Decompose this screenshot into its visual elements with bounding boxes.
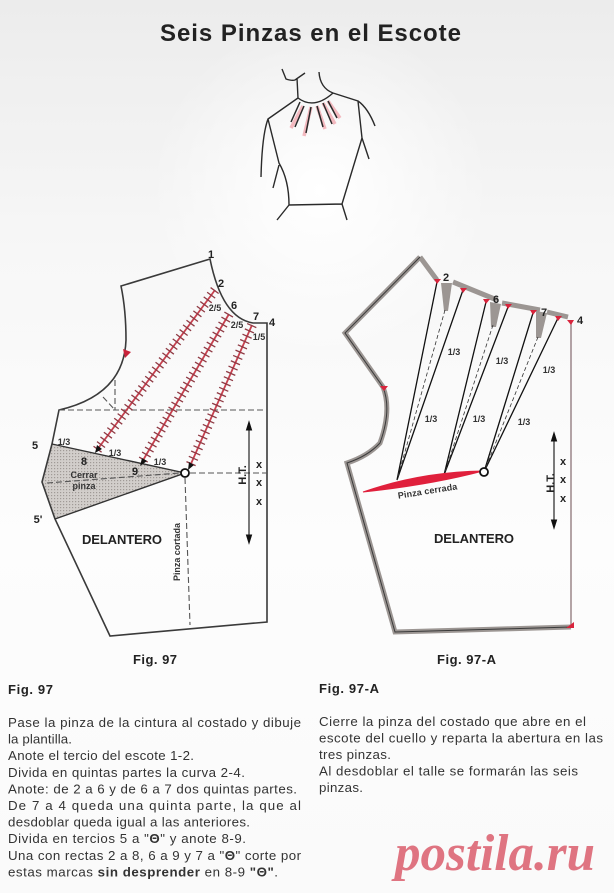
diagram point labels: 4 xyxy=(577,315,584,327)
diagram point labels: 2/5 xyxy=(209,303,221,313)
red notches xyxy=(380,279,574,628)
text block: Fig. 97 instructions xyxy=(8,682,302,879)
diagram point labels: x xyxy=(560,474,567,486)
diagram point labels: x xyxy=(560,493,567,505)
apex circle xyxy=(480,468,488,476)
apex circle xyxy=(181,469,189,477)
slash arrowheads xyxy=(95,445,194,470)
diagram point labels: 1/3 xyxy=(496,356,508,366)
diagram point labels: 6 xyxy=(231,300,237,312)
pattern diagram: Fig. 97-A xyxy=(345,257,584,632)
text block: Fig. 97-A instructions: Cierre la pinza del costado que abre en el xyxy=(319,714,586,729)
pattern diagram: Fig. 97 xyxy=(32,249,276,636)
text block: Fig. 97 instructions: estas marcas sin desprender en 8-9 "Θ". xyxy=(8,864,278,879)
diagram point labels: 4 xyxy=(269,317,276,329)
diagram point labels: 7 xyxy=(253,311,259,323)
text block: Fig. 97 instructions: Divida en tercios 5 a "Θ" y anote 8-9. xyxy=(8,831,246,846)
text block: Fig. 97 instructions: Divida en quintas partes la curva 2-4. xyxy=(8,765,245,780)
closed dart in red xyxy=(363,471,483,492)
caption Fig. 97-A: Fig. 97-A xyxy=(437,652,497,667)
text block: Fig. 97 instructions: desdoblar queda igual a las anteriores. xyxy=(8,815,250,830)
bodice outline xyxy=(42,259,267,636)
diagram point labels: 8 xyxy=(81,456,87,468)
height arrow xyxy=(246,422,252,543)
text block: Fig. 97 instructions: Anote el tercio del escote 1-2. xyxy=(8,748,194,763)
label pinza cerrada: Pinza cerrada xyxy=(397,481,459,501)
diagram point labels: 1/3 xyxy=(109,448,121,458)
red slash lines with ticks xyxy=(97,290,252,466)
diagram point labels: x xyxy=(560,456,567,468)
shaded closing dart xyxy=(42,444,185,519)
diagram point labels: 1/3 xyxy=(58,437,70,447)
diagram point labels: 1/3 xyxy=(425,414,437,424)
diagram point labels xyxy=(425,272,584,505)
rotated label H.T.: H.T. xyxy=(545,473,557,493)
diagram point labels: 2 xyxy=(218,278,224,290)
text block: Fig. 97 instructions: De 7 a 4 queda una quinta parte, la que al xyxy=(8,798,301,813)
diagram point labels: 5' xyxy=(34,514,43,526)
diagram point labels: 2/5 xyxy=(231,320,243,330)
text block: Fig. 97-A instructions xyxy=(319,681,603,795)
height arrow xyxy=(552,433,556,528)
label DELANTERO: DELANTERO xyxy=(434,531,514,546)
text block: Fig. 97-A instructions: tres pinzas. xyxy=(319,747,391,762)
diagram point labels: 5 xyxy=(32,440,38,452)
diagram point labels: 1/3 xyxy=(543,365,555,375)
diagram point labels: 1/3 xyxy=(473,414,485,424)
diagram point labels: Cerrar xyxy=(70,470,98,480)
diagram point labels xyxy=(32,249,276,526)
rotated label H.T.: H.T. xyxy=(237,465,249,485)
watermark logo: postila.ru xyxy=(391,825,595,882)
icon: torso sketch with neck darts xyxy=(261,69,375,220)
diagram point labels: x xyxy=(256,459,263,471)
text block: Fig. 97-A instructions: escote del cuello y reparta la abertura en las xyxy=(319,730,603,746)
rotated label pinza cortada: Pinza cortada xyxy=(172,522,182,581)
diagram point labels: 6 xyxy=(493,294,499,306)
diagram point labels: 1/5 xyxy=(253,332,265,342)
text block: Fig. 97 instructions: Una con rectas 2 a 8, 6 a 9 y 7 a "Θ" corte por xyxy=(8,848,302,863)
heading Fig. 97-A: Fig. 97-A xyxy=(319,681,380,696)
caption Fig. 97: Fig. 97 xyxy=(133,652,177,667)
opened dart lines xyxy=(397,282,558,480)
diagram point labels: 1/3 xyxy=(154,457,166,467)
label DELANTERO: DELANTERO xyxy=(82,532,162,547)
armhole notch xyxy=(123,349,131,358)
title: Seis Pinzas en el Escote xyxy=(160,20,461,47)
diagram point labels: x xyxy=(256,496,263,508)
text block: Fig. 97 instructions: Pase la pinza de la cintura al costado y dibuje xyxy=(8,715,301,730)
construction dashed lines xyxy=(47,380,267,625)
text block: Fig. 97 instructions: la plantilla. xyxy=(8,732,72,747)
text block: Fig. 97-A instructions: pinzas. xyxy=(319,780,363,795)
diagram point labels: 9 xyxy=(132,466,138,478)
text block: Fig. 97 instructions: Anote: de 2 a 6 y de 6 a 7 dos quintas partes. xyxy=(8,781,297,796)
heading Fig. 97: Fig. 97 xyxy=(8,682,53,697)
grey dart tabs xyxy=(441,283,547,338)
diagram point labels: x xyxy=(256,477,263,489)
diagram point labels: 1/3 xyxy=(518,417,530,427)
diagram point labels: 1/3 xyxy=(448,347,460,357)
diagram point labels: 7 xyxy=(541,307,547,319)
text block: Fig. 97-A instructions: Al desdoblar el talle se formarán las seis xyxy=(319,764,578,778)
diagram point labels: 2 xyxy=(443,272,449,284)
diagram point labels: pinza xyxy=(72,481,96,491)
diagram point labels: 1 xyxy=(208,249,214,261)
thick grey bodice outline xyxy=(345,257,571,632)
